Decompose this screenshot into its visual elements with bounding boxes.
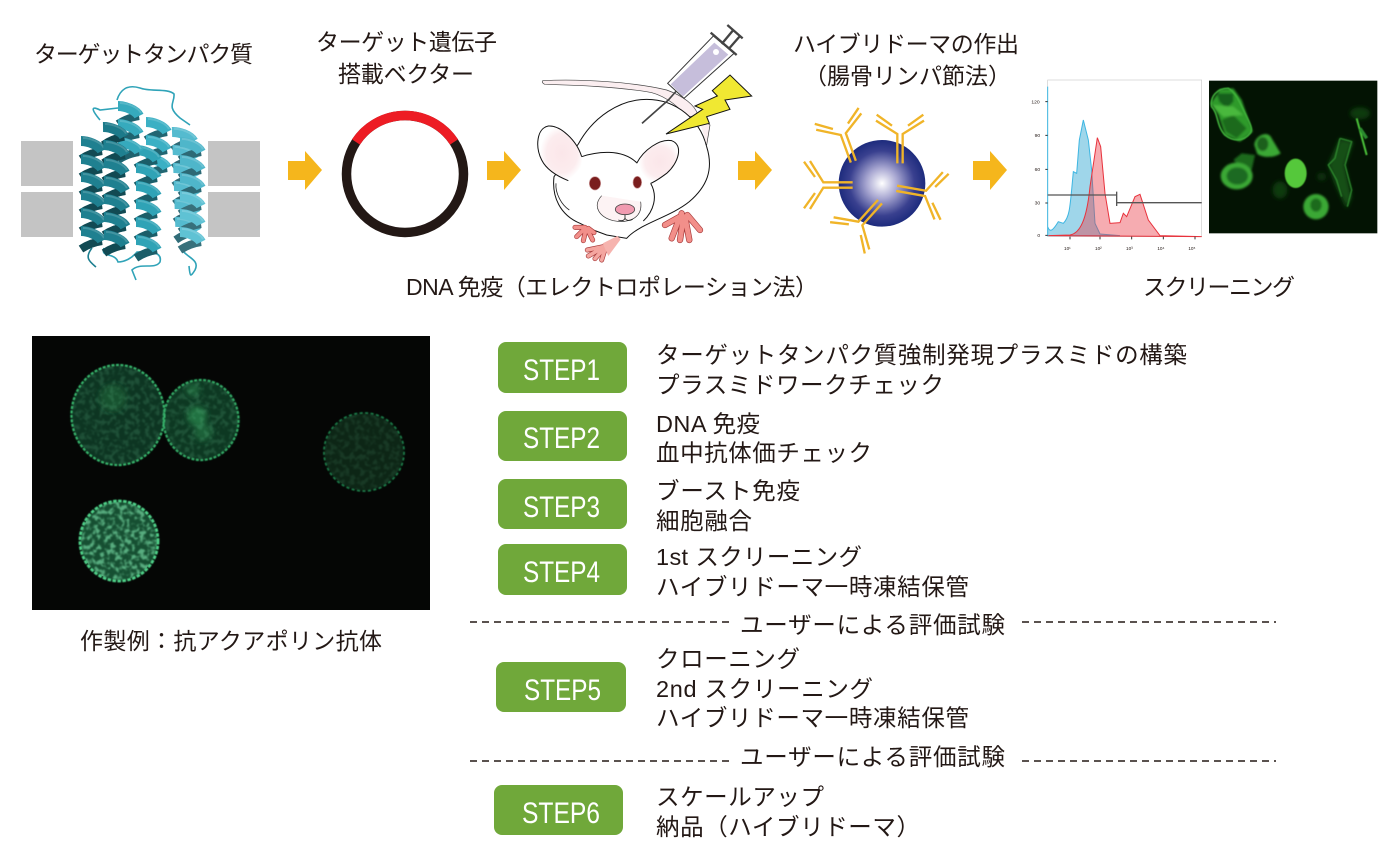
hybridoma cell with antibodies (804, 108, 949, 254)
step 6 (494, 784, 920, 840)
flow cytometry histogram: 10⁴ (1157, 246, 1165, 251)
flow cytometry histogram: 10² (1095, 246, 1102, 251)
protein ribbon structure (81, 87, 203, 280)
flow cytometry histogram (1031, 80, 1202, 251)
step 1 (498, 342, 1187, 398)
step 6: スケールアップ (656, 784, 824, 810)
step 4 (498, 544, 969, 600)
step 6: STEP6 (522, 797, 600, 830)
cell fluorescence image (32, 336, 430, 610)
step 5: ハイブリドーマ一時凍結保管 (656, 705, 969, 731)
step 5: クローニング (656, 646, 800, 672)
step 5 (496, 646, 969, 731)
caption: DNA immunization: DNA 免疫（エレクトロポレーション法） (406, 274, 818, 300)
step 2 (498, 411, 872, 466)
fluorescence micrograph: screening (1209, 81, 1377, 233)
step 4: ハイブリドーマ一時凍結保管 (656, 574, 969, 600)
caption: screening: スクリーニング (1143, 274, 1295, 300)
step 5: STEP5 (524, 674, 601, 707)
heading: hybridoma line 2: （腸骨リンパ節法） (804, 63, 1011, 89)
flow cytometry histogram: 30 (1035, 201, 1040, 207)
step 3: ブースト免疫 (656, 478, 800, 504)
mouse with syringe and lightning (538, 25, 752, 260)
step 2: DNA 免疫 (656, 411, 760, 437)
flow cytometry histogram: 10³ (1126, 246, 1133, 251)
heading: vector: ターゲット遺伝子 (316, 29, 497, 55)
heading: target protein: ターゲットタンパク質 (34, 41, 253, 67)
step 3: STEP3 (523, 491, 600, 524)
arrow 2 (487, 151, 521, 190)
arrow 1 (288, 151, 322, 190)
membrane blocks (21, 141, 260, 237)
step 3: 細胞融合 (656, 508, 752, 534)
heading: vector line 2: 搭載ベクター (338, 61, 474, 87)
step 1: プラスミドワークチェック (656, 372, 944, 398)
step 4: 1st スクリーニング (656, 544, 862, 570)
flow cytometry histogram: 10⁵ (1188, 246, 1196, 251)
step 1: ターゲットタンパク質強制発現プラスミドの構築 (656, 342, 1187, 368)
step 5: 2nd スクリーニング (656, 676, 873, 702)
flow cytometry histogram: 60 (1035, 167, 1040, 173)
step 1: STEP1 (523, 354, 600, 387)
step 6: 納品（ハイブリドーマ） (656, 814, 920, 840)
heading: hybridoma: ハイブリドーマの作出 (793, 31, 1019, 57)
arrow 4 (973, 151, 1007, 190)
plasmid ring (346, 115, 464, 232)
divider label: user evaluation 1: ユーザーによる評価試験 (740, 612, 1005, 638)
flow cytometry histogram: 10¹ (1064, 246, 1071, 251)
step 3 (498, 478, 800, 534)
step 2: 血中抗体価チェック (656, 440, 872, 466)
flow cytometry histogram: 120 (1031, 99, 1040, 105)
step 2: STEP2 (523, 422, 600, 455)
arrow 3 (738, 151, 772, 190)
flow cytometry histogram: 0 (1037, 233, 1040, 239)
flow cytometry histogram: 90 (1035, 133, 1040, 139)
divider label: user evaluation 2: ユーザーによる評価試験 (740, 744, 1005, 770)
caption: example: 作製例：抗アクアポリン抗体 (80, 628, 382, 654)
step 4: STEP4 (523, 556, 600, 589)
